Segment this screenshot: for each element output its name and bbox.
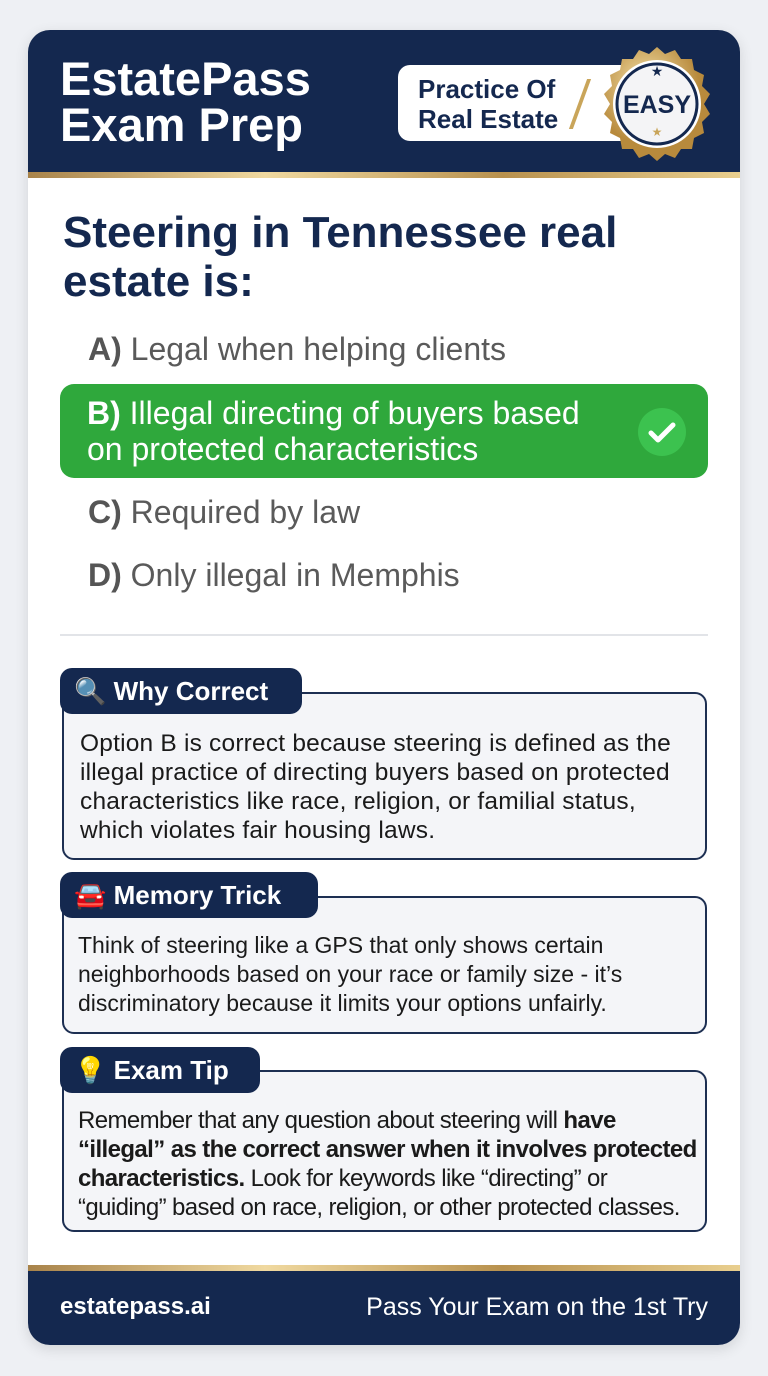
panel: memory trick: Think of steering like a GPS that only shows certain bbox=[78, 932, 603, 958]
badge: EASY: ★ bbox=[652, 125, 662, 139]
panel: exam tip: characteristics. Look for keywords like “directing” or bbox=[78, 1165, 607, 1192]
icon: check bbox=[638, 408, 686, 456]
panel: why correct: 🔍 Why Correct bbox=[74, 676, 268, 706]
footer url: estatepass.ai bbox=[60, 1293, 211, 1320]
panel: exam tip: Remember that any question about steering will have bbox=[78, 1107, 616, 1134]
question title: Steering in Tennessee real bbox=[63, 208, 617, 257]
category pill: Practice Of bbox=[418, 74, 555, 104]
option C: C) Required by law bbox=[88, 494, 360, 530]
panel: exam tip: 💡 Exam Tip bbox=[74, 1055, 229, 1085]
panel: exam tip: “illegal” as the correct answer when it involves protected bbox=[78, 1136, 697, 1163]
option B correct: B) Illegal directing of buyers based bbox=[87, 395, 580, 431]
panel: why correct: characteristics like race, religion, or familial status, bbox=[80, 788, 636, 815]
option D: D) Only illegal in Memphis bbox=[88, 557, 460, 593]
brand title: EstatePass bbox=[60, 52, 311, 105]
panel: why correct: Option B is correct because steering is defined as the bbox=[80, 730, 671, 757]
panel: why correct bbox=[60, 668, 707, 860]
panel: exam tip bbox=[60, 1047, 707, 1232]
panel: why correct: which violates fair housing laws. bbox=[80, 817, 435, 844]
panel: memory trick: discriminatory because it limits your options unfairly. bbox=[78, 990, 607, 1016]
badge: EASY bbox=[604, 47, 710, 161]
option B correct: on protected characteristics bbox=[87, 431, 478, 467]
badge: EASY: ★ bbox=[651, 63, 663, 79]
footer tagline: Pass Your Exam on the 1st Try bbox=[366, 1293, 708, 1321]
category pill bbox=[398, 65, 638, 141]
header bbox=[28, 30, 740, 172]
panel: memory trick: 🚘 Memory Trick bbox=[74, 880, 281, 910]
question title bbox=[63, 208, 617, 306]
panel: memory trick bbox=[60, 872, 707, 1034]
panel: why correct: illegal practice of directing buyers based on protected bbox=[80, 759, 670, 786]
panel: exam tip: “guiding” based on race, religion, or other protected classes. bbox=[78, 1194, 680, 1221]
footer bbox=[28, 1265, 740, 1345]
question title: estate is: bbox=[63, 257, 254, 306]
option A: A) Legal when helping clients bbox=[88, 331, 506, 367]
panel: memory trick: neighborhoods based on your race or family size - it’s bbox=[78, 961, 622, 987]
option B correct bbox=[60, 384, 708, 478]
badge: EASY: EASY bbox=[623, 91, 691, 119]
brand title: Exam Prep bbox=[60, 98, 303, 151]
category pill: Real Estate bbox=[418, 104, 558, 134]
brand title bbox=[60, 52, 311, 151]
